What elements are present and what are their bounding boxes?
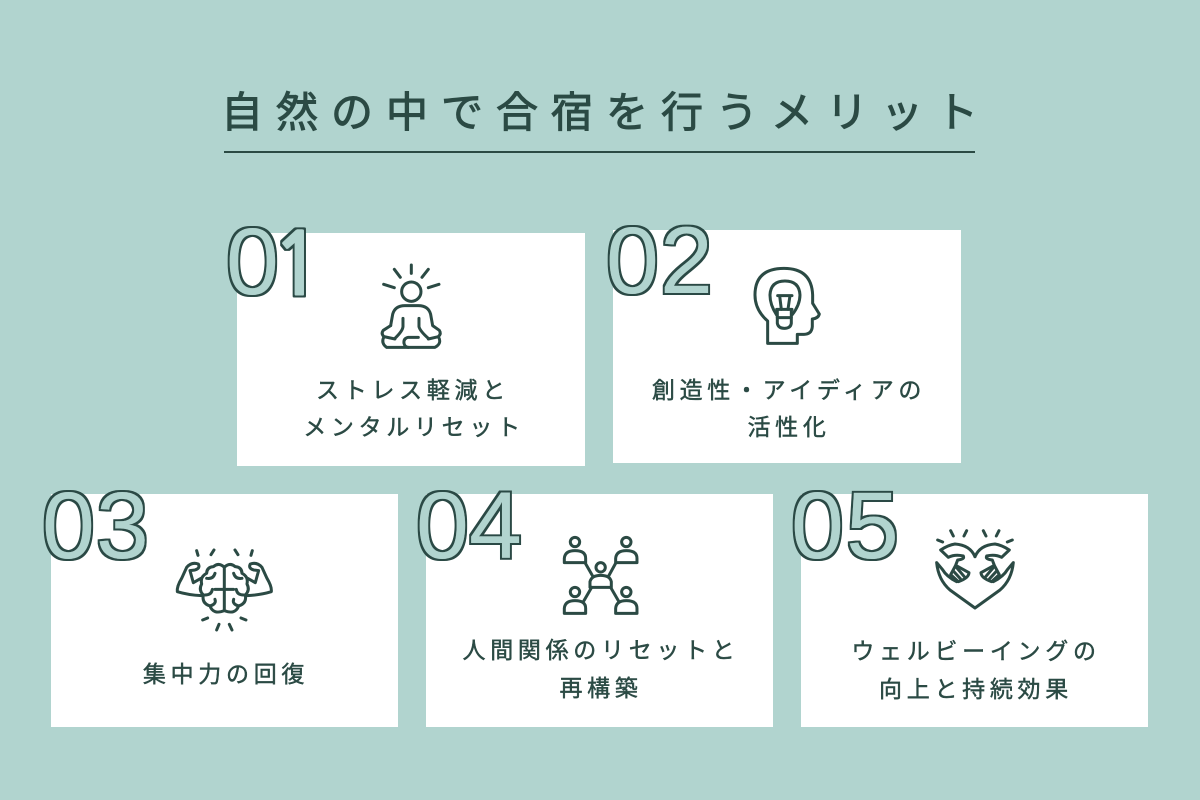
panel: card 02: [606, 208, 961, 463]
card text: 人間関係のリセットと: [462, 637, 740, 663]
icon: strong brain: [177, 550, 271, 630]
card text: ウェルビーイングの: [851, 638, 1101, 664]
card text: [462, 637, 740, 701]
card text: 集中力の回復: [143, 661, 309, 687]
panel: card 01: [226, 209, 585, 466]
icon: hands forming a heart: [937, 531, 1013, 608]
card text: 創造性・アイディアの: [652, 377, 926, 403]
number 02: 02: [606, 208, 713, 314]
panel: card 05: [791, 473, 1148, 727]
card text: 向上と持続効果: [879, 676, 1073, 702]
panel: card 03: [42, 473, 398, 727]
panel: card 04: [416, 473, 773, 727]
number 05: 05: [791, 473, 899, 579]
card text: [652, 377, 926, 440]
icon: people network: [564, 537, 637, 613]
card text: [303, 377, 525, 440]
card text: ストレス軽減と: [316, 377, 510, 403]
card text: [851, 638, 1101, 702]
icon: head with light bulb: [755, 268, 819, 343]
card text: 再構築: [559, 675, 643, 701]
number 01: 1: [271, 222, 324, 308]
number 03: 03: [42, 473, 149, 579]
title: 自然の中で合宿を行うメリット: [221, 89, 991, 136]
number 04: 04: [416, 473, 522, 579]
icon: meditating person: [382, 265, 440, 347]
card text: メンタルリセット: [303, 414, 525, 440]
card text: 活性化: [747, 414, 831, 440]
number 01: 0: [226, 209, 279, 315]
